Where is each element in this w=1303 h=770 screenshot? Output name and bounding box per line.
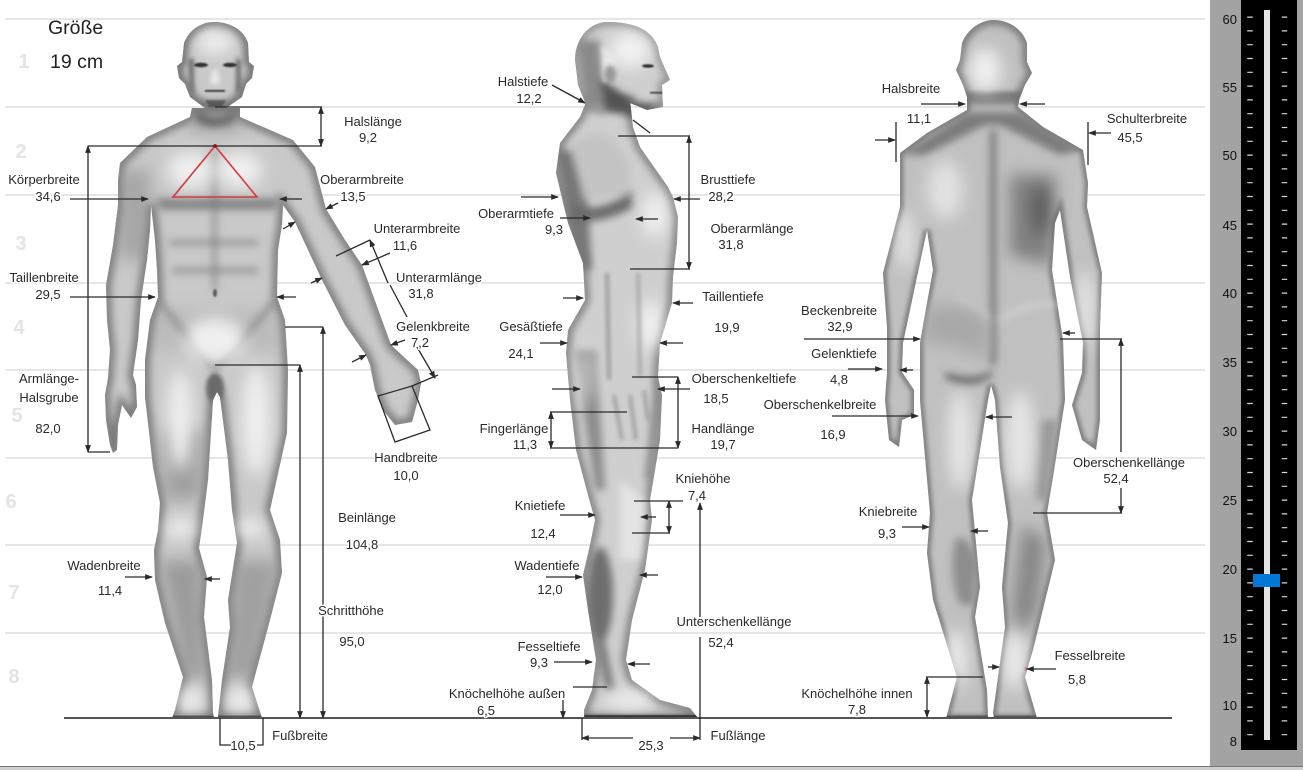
labels: back view: 4,8 (830, 372, 848, 387)
labels: side view (449, 74, 796, 753)
height slider panel (1210, 0, 1303, 766)
labels: side view: Knietiefe (515, 498, 565, 513)
labels: side view: Unterschenkellänge (677, 614, 791, 629)
labels: back view: 9,3 (878, 526, 896, 541)
labels: side view: 19,7 (710, 437, 736, 452)
figure: side view (556, 22, 698, 717)
labels: front view: 11,4 (98, 583, 122, 598)
labels: front view: 34,6 (35, 189, 61, 204)
labels: front view (8, 114, 482, 753)
height scale grid lines and head-unit numbers: 2 (15, 141, 27, 163)
labels: back view: 11,1 (907, 111, 931, 126)
size readout: 19 cm (50, 51, 103, 73)
labels: side view: Handlänge (692, 421, 754, 436)
slider track (1264, 10, 1270, 740)
labels: front view: 9,2 (359, 130, 377, 145)
slider scale numbers (1223, 12, 1237, 749)
labels: front view: Beinlänge (338, 510, 396, 525)
height scale grid lines and head-unit numbers: 7 (8, 582, 20, 604)
labels: back view: Kniebreite (859, 504, 917, 519)
labels: front view: 11,6 (393, 238, 417, 253)
slider scale numbers: 10 (1223, 698, 1237, 713)
labels: front view: Oberarmbreite (320, 172, 404, 187)
slider scale numbers: 45 (1223, 218, 1237, 233)
labels: side view: Fingerlänge (480, 421, 548, 436)
labels: front view: Gelenkbreite (396, 319, 470, 334)
labels: back view: 52,4 (1103, 471, 1129, 486)
labels: front view: Halslänge (344, 114, 402, 129)
labels: side view: 7,4 (688, 488, 706, 503)
labels: side view: 6,5 (477, 703, 495, 718)
slider thumb (1253, 574, 1280, 587)
height scale grid lines and head-unit numbers: 5 (11, 405, 23, 427)
labels: back view: 16,9 (820, 427, 846, 442)
labels: side view: Knöchelhöhe außen (449, 686, 565, 701)
bottom window edge (0, 766, 1303, 770)
red chest triangle (173, 144, 257, 197)
labels: side view: Fußlänge (711, 728, 765, 743)
labels: side view: Taillentiefe (702, 289, 764, 304)
slider scale numbers: 55 (1223, 80, 1237, 95)
height scale grid lines and head-unit numbers: 3 (15, 233, 27, 255)
labels: side view: 52,4 (708, 635, 734, 650)
labels: front view: Unterarmlänge (396, 270, 482, 285)
labels: front view: 13,5 (340, 189, 366, 204)
labels: front view: Körperbreite (8, 172, 80, 187)
labels: front view: Taillenbreite (9, 270, 79, 285)
slider scale numbers: 20 (1223, 562, 1237, 577)
labels: back view: 5,8 (1068, 672, 1086, 687)
labels: front view: 82,0 (35, 421, 61, 436)
labels: side view: 24,1 (508, 346, 534, 361)
labels: back view: Beckenbreite (801, 303, 877, 318)
labels: back view: Schulterbreite (1107, 111, 1187, 126)
labels: side view: 9,3 (545, 222, 563, 237)
slider scale numbers: 50 (1223, 148, 1237, 163)
labels: back view: 45,5 (1117, 130, 1143, 145)
measurement lines: side view (521, 85, 700, 740)
labels: side view: Brusttiefe (701, 172, 755, 187)
labels: front view: 104,8 (346, 537, 378, 552)
height scale grid lines and head-unit numbers: 8 (8, 666, 20, 688)
labels: front view: Unterarmbreite (374, 221, 460, 236)
labels: side view: Kniehöhe (676, 471, 730, 486)
figure: front view (95, 15, 430, 725)
slider scale numbers: 30 (1223, 424, 1237, 439)
labels: front view: 10,0 (393, 468, 419, 483)
figure: back view (875, 15, 1110, 725)
labels: back view: Fesselbreite (1055, 648, 1125, 663)
labels: back view: Oberschenkellänge (1073, 455, 1185, 470)
labels: side view: 9,3 (530, 655, 548, 670)
slider scale numbers: 35 (1223, 355, 1237, 370)
labels: side view: Gesäßtiefe (499, 319, 563, 334)
labels: back view: Knöchelhöhe innen (801, 686, 913, 701)
labels: side view: 18,5 (703, 391, 729, 406)
measurement lines: back view (804, 104, 1122, 717)
labels: side view: 28,2 (708, 189, 734, 204)
labels: side view: 12,4 (530, 526, 556, 541)
labels: front view: 31,8 (408, 286, 434, 301)
labels: front view: 29,5 (35, 287, 61, 302)
labels: back view: Halsbreite (882, 81, 940, 96)
height scale grid lines and head-unit numbers: 4 (13, 317, 25, 339)
labels: front view: Armlänge- (19, 371, 79, 386)
labels: side view: 11,3 (513, 437, 537, 452)
labels: side view: 31,8 (718, 237, 744, 252)
labels: back view: Oberschenkelbreite (764, 397, 876, 412)
slider scale numbers: 60 (1223, 12, 1237, 27)
labels: side view: Halstiefe (498, 74, 548, 89)
labels: front view: Wadenbreite (67, 558, 141, 573)
labels: side view: 25,3 (638, 738, 664, 753)
slider ticks (1250, 16, 1284, 738)
slider scale numbers: 8 (1230, 734, 1237, 749)
labels: side view: Oberarmtiefe (478, 206, 554, 221)
labels: side view: 12,2 (516, 91, 542, 106)
ground line (64, 717, 1172, 719)
labels: back view: 7,8 (848, 702, 866, 717)
slider scale numbers: 15 (1223, 631, 1237, 646)
labels: side view: Oberschenkeltiefe (692, 371, 796, 386)
labels: front view: 95,0 (339, 634, 365, 649)
labels: back view: Gelenktiefe (811, 346, 877, 361)
slider scale numbers: 40 (1223, 286, 1237, 301)
labels: front view: Halsgrube (19, 390, 79, 405)
size readout: Größe (48, 17, 103, 39)
labels: front view: 7,2 (411, 335, 429, 350)
labels: back view: 32,9 (827, 319, 853, 334)
labels: front view: Schritthöhe (318, 603, 384, 618)
labels: front view: Handbreite (374, 450, 438, 465)
height scale grid lines and head-unit numbers: 1 (18, 51, 30, 73)
measurement lines: front view (70, 107, 438, 745)
size readout (48, 17, 103, 73)
labels: side view: Fesseltiefe (518, 639, 580, 654)
labels: side view: 12,0 (537, 582, 563, 597)
height scale grid lines and head-unit numbers: 6 (5, 491, 17, 513)
labels: side view: Oberarmlänge (710, 221, 794, 236)
labels: front view: 10,5 (230, 738, 256, 753)
labels: side view: 19,9 (714, 320, 740, 335)
labels: back view (764, 81, 1187, 717)
slider scale numbers: 25 (1223, 493, 1237, 508)
labels: front view: Fußbreite (272, 728, 328, 743)
labels: side view: Wadentiefe (514, 558, 580, 573)
